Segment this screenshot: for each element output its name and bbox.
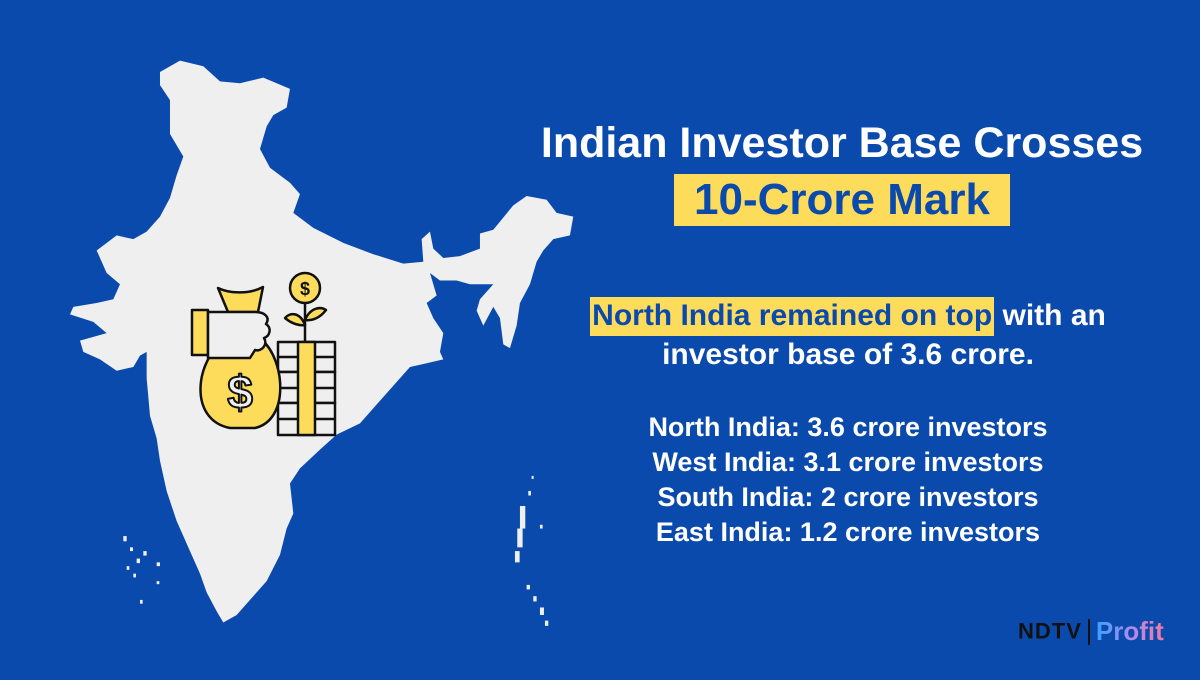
islands [123,476,548,626]
plant and coin [285,273,326,342]
plant and coin: $ [300,279,310,299]
bag: $ [227,366,253,418]
hand [192,310,270,358]
regional investor list [648,412,1048,547]
title highlight: 10-Crore Mark: 10-Crore Mark [694,175,990,224]
title: Indian Investor Base Crosses [541,119,1143,167]
map of India with icon [70,60,574,626]
coin stack [278,342,335,435]
map: India outline [70,61,573,626]
icon: money bag with hand and coin stack [192,273,335,435]
title [541,119,1143,226]
summary text: North India remained on top with an [592,299,1106,332]
logo: NDTV Profit: NDTV Profit [1018,616,1164,646]
regional investor list: West India: 3.1 crore investors [652,447,1044,477]
regional investor list: North India: 3.6 crore investors [648,412,1048,442]
regional investor list: South India: 2 crore investors [657,482,1039,512]
bag [200,287,280,428]
summary text: investor base of 3.6 crore. [662,338,1034,371]
regional investor list: East India: 1.2 crore investors [656,517,1040,547]
summary text [590,297,1106,371]
